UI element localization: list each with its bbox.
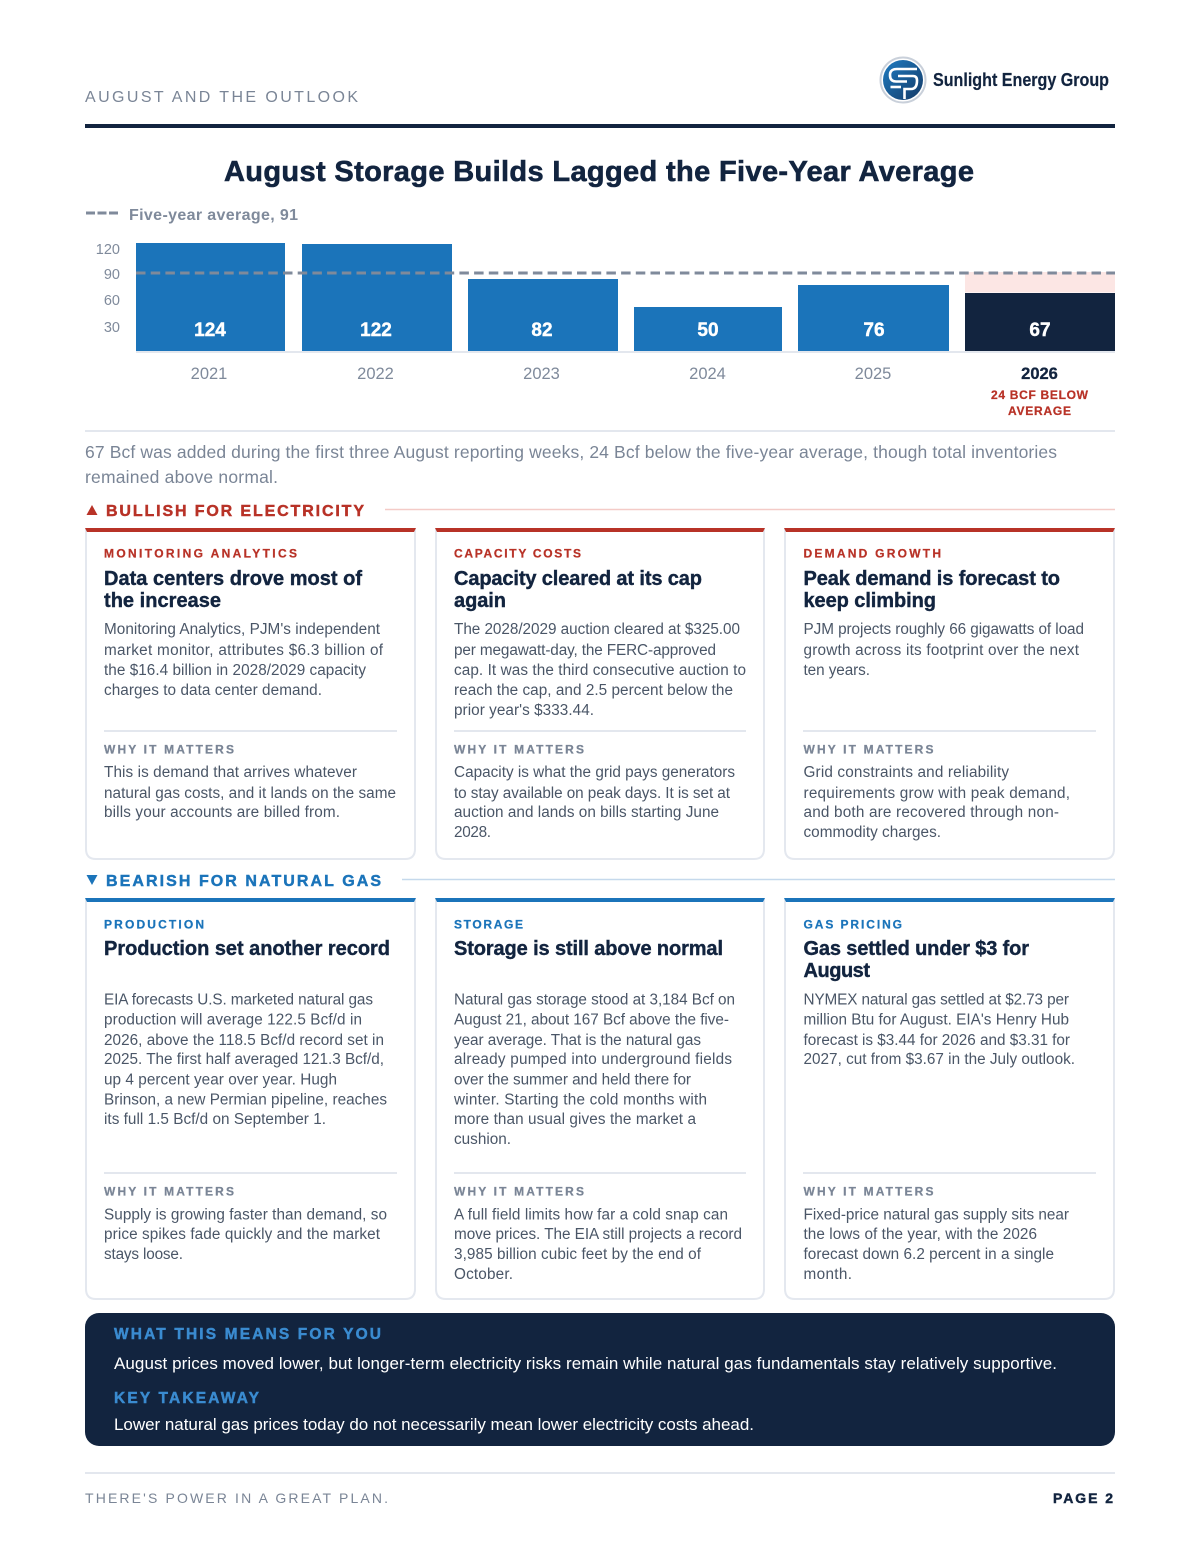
card body: growth across its footprint over the next	[804, 642, 1080, 659]
card body: 2026, above the 118.5 Bcf/d record set in	[104, 1032, 384, 1049]
bar 2021: 124	[194, 320, 226, 341]
bar 2024: 2024	[689, 365, 726, 383]
kicker: PRODUCTION	[104, 918, 204, 932]
why it matters: WHY IT MATTERS	[104, 742, 234, 756]
card title	[804, 568, 1060, 612]
bar 2026: 2026	[1021, 365, 1058, 383]
card body: reach the cap, and 2.5 percent below the	[454, 682, 733, 699]
card title	[104, 568, 362, 612]
card body: its full 1.5 Bcf/d on September 1.	[104, 1111, 326, 1128]
kicker: GAS PRICING	[804, 918, 902, 932]
bar 2023	[468, 279, 618, 383]
why it matters: requirements grow with peak demand,	[804, 785, 1070, 802]
card body: year average. That is the natural gas	[454, 1032, 701, 1049]
card title: the increase	[104, 590, 221, 612]
card body: August 21, about 167 Bcf above the five-	[454, 1012, 729, 1028]
card body: cushion.	[454, 1131, 511, 1148]
why it matters	[454, 1184, 742, 1283]
card body: winter. Starting the cold months with	[453, 1092, 707, 1108]
card body: The 2028/2029 auction cleared at $325.00	[454, 621, 740, 638]
chart legend: Five-year average, 91	[129, 207, 298, 224]
card body: up 4 percent year over year. Hugh	[104, 1072, 337, 1088]
bar 2022	[302, 244, 452, 383]
why it matters	[804, 1184, 1069, 1283]
why it matters	[104, 742, 396, 821]
section heading: bearish: BEARISH FOR NATURAL GAS	[106, 873, 381, 890]
header rule	[85, 124, 1115, 128]
why it matters: month.	[804, 1266, 852, 1283]
page number: PAGE 2	[1053, 1490, 1113, 1506]
y axis labels: 90	[104, 267, 120, 283]
callout text: August prices moved lower, but longer-term electricity risks remain while natural gas fundamentals stay relatively supportive.	[114, 1354, 1057, 1373]
why it matters: the lows of the year, with the 2026	[804, 1226, 1037, 1243]
shortfall label: AVERAGE	[1008, 404, 1071, 418]
card body	[453, 992, 735, 1148]
shortfall band 2026	[965, 272, 1115, 292]
why it matters: to stay available on peak days. It is set at	[454, 785, 731, 802]
panel: storage	[435, 898, 765, 1299]
bar 2026	[965, 293, 1115, 383]
chart summary text: remained above normal.	[85, 467, 278, 487]
card title	[804, 938, 1029, 982]
kicker: MONITORING ANALYTICS	[104, 546, 297, 560]
kicker: CAPACITY COSTS	[454, 546, 581, 560]
card body: Natural gas storage stood at 3,184 Bcf on	[454, 992, 735, 1008]
card body	[104, 621, 384, 699]
why it matters: Grid constraints and reliability	[804, 764, 1009, 781]
section heading: bullish: BULLISH FOR ELECTRICITY	[106, 503, 364, 520]
why it matters: and both are recovered through non-	[804, 804, 1059, 821]
shortfall label	[991, 388, 1089, 418]
card body: charges to data center demand.	[104, 682, 322, 699]
why it matters: WHY IT MATTERS	[104, 1184, 234, 1198]
card body: PJM projects roughly 66 gigawatts of load	[804, 621, 1084, 638]
card body: cap. It was the third consecutive auction to	[454, 662, 746, 679]
card body: Monitoring Analytics, PJM's independent	[104, 621, 381, 638]
why it matters: natural gas costs, and it lands on the same	[104, 785, 396, 802]
kicker: STORAGE	[454, 918, 523, 932]
card title: Production set another record	[104, 938, 390, 960]
section heading: bearish	[86, 873, 1115, 890]
why it matters: price spikes fade quickly and the market	[104, 1226, 381, 1243]
section heading: bullish	[86, 503, 1115, 520]
why it matters	[454, 742, 735, 841]
card title: Data centers drove most of	[104, 568, 362, 590]
why it matters: This is demand that arrives whatever	[104, 764, 357, 781]
callout: what this means	[85, 1313, 1115, 1446]
panel: capacity costs	[435, 528, 765, 859]
why it matters: Supply is growing faster than demand, so	[104, 1206, 387, 1224]
why it matters: forecast down 6.2 percent in a single	[804, 1246, 1054, 1263]
card body: over the summer and held there for	[454, 1072, 691, 1088]
card body: the $16.4 billion in 2028/2029 capacity	[104, 662, 366, 679]
bar chart: August storage builds	[96, 242, 1115, 418]
card body: EIA forecasts U.S. marketed natural gas	[104, 992, 373, 1008]
card body	[804, 992, 1075, 1068]
card body: 2027, cut from $3.67 in the July outlook.	[804, 1051, 1075, 1068]
card body: ten years.	[804, 662, 870, 679]
card title: Storage is still above normal	[454, 938, 723, 960]
shortfall label: 24 BCF BELOW	[991, 388, 1089, 402]
bar 2025: 76	[863, 320, 885, 341]
why it matters: WHY IT MATTERS	[454, 1184, 584, 1198]
why it matters: move prices. The EIA still projects a record	[454, 1226, 742, 1243]
header eyebrow: AUGUST AND THE OUTLOOK	[85, 89, 358, 106]
why it matters: WHY IT MATTERS	[804, 742, 934, 756]
card title: Gas settled under $3 for	[804, 938, 1029, 960]
bar 2021: 2021	[191, 365, 227, 383]
card body: production will average 122.5 Bcf/d in	[104, 1012, 362, 1028]
why it matters: WHY IT MATTERS	[804, 1184, 934, 1198]
why it matters: stays loose.	[104, 1246, 183, 1263]
card body: forecast is $3.44 for 2026 and $3.31 for	[804, 1032, 1070, 1049]
card title: Peak demand is forecast to	[804, 568, 1060, 590]
y axis labels	[96, 242, 120, 336]
chart summary text	[85, 442, 1057, 487]
card title	[454, 568, 702, 612]
five-year average line	[136, 272, 1115, 274]
bar 2025	[798, 285, 949, 383]
logo: Sunlight Energy Group: Sunlight Energy Group	[933, 69, 1109, 90]
chart summary text: 67 Bcf was added during the first three August reporting weeks, 24 Bcf below the five-year average, though total inventories	[85, 442, 1057, 462]
why it matters	[804, 742, 1070, 841]
why it matters: Capacity is what the grid pays generators	[454, 764, 735, 781]
why it matters: 3,985 billion cubic feet by the end of	[454, 1246, 702, 1263]
why it matters: bills your accounts are billed from.	[104, 804, 340, 821]
bar 2024: 50	[697, 320, 719, 341]
y axis labels: 120	[96, 242, 120, 258]
y axis labels: 60	[104, 293, 120, 309]
card body: 2025. The first half averaged 121.3 Bcf/d,	[104, 1051, 384, 1068]
card body	[804, 621, 1084, 679]
why it matters	[104, 1184, 387, 1263]
logo: Sunlight Energy Group	[880, 58, 1109, 102]
footer tagline: THERE'S POWER IN A GREAT PLAN.	[85, 1490, 388, 1506]
card title: Capacity cleared at its cap	[454, 568, 702, 590]
panel: demand growth	[784, 528, 1115, 859]
card body: more than usual gives the market a	[454, 1111, 696, 1128]
why it matters: October.	[454, 1266, 513, 1283]
bar 2025: 2025	[855, 365, 891, 383]
panel: monitoring analytics	[85, 528, 416, 859]
panel: production	[85, 898, 416, 1299]
card body: NYMEX natural gas settled at $2.73 per	[804, 992, 1069, 1008]
card title: again	[454, 590, 506, 612]
card body: per megawatt-day, the FERC-approved	[454, 642, 716, 659]
y axis labels: 30	[104, 320, 120, 336]
bar 2021	[136, 243, 285, 383]
card body: Brinson, a new Permian pipeline, reaches	[104, 1092, 387, 1108]
card body: prior year's $333.44.	[454, 702, 594, 719]
kicker: DEMAND GROWTH	[804, 546, 941, 560]
card body: already pumped into underground fields	[454, 1051, 732, 1068]
bar 2023: 82	[531, 320, 553, 341]
bar 2022: 122	[360, 320, 392, 341]
why it matters: Fixed-price natural gas supply sits near	[804, 1206, 1069, 1224]
why it matters: auction and lands on bills starting June	[454, 804, 719, 821]
bar 2024	[634, 307, 782, 383]
card body: million Btu for August. EIA's Henry Hub	[804, 1012, 1069, 1028]
card body	[454, 621, 746, 719]
callout heading: WHAT THIS MEANS FOR YOU	[114, 1326, 381, 1343]
why it matters: 2028.	[454, 824, 491, 841]
card title: August	[804, 960, 870, 982]
chart title: August Storage Builds Lagged the Five-Year Average	[224, 156, 974, 188]
bar 2026: 67	[1029, 320, 1051, 341]
card body: market monitor, attributes $6.3 billion of	[104, 642, 384, 659]
panel: gas pricing	[784, 898, 1115, 1299]
card title: keep climbing	[804, 590, 936, 612]
why it matters: A full field limits how far a cold snap can	[454, 1206, 728, 1224]
why it matters: WHY IT MATTERS	[454, 742, 584, 756]
takeaway text: Lower natural gas prices today do not necessarily mean lower electricity costs ahead.	[114, 1415, 754, 1434]
card body	[104, 992, 387, 1128]
why it matters: commodity charges.	[804, 824, 941, 841]
bar 2022: 2022	[357, 365, 394, 383]
takeaway heading: KEY TAKEAWAY	[114, 1390, 260, 1407]
bar 2023: 2023	[523, 365, 560, 383]
